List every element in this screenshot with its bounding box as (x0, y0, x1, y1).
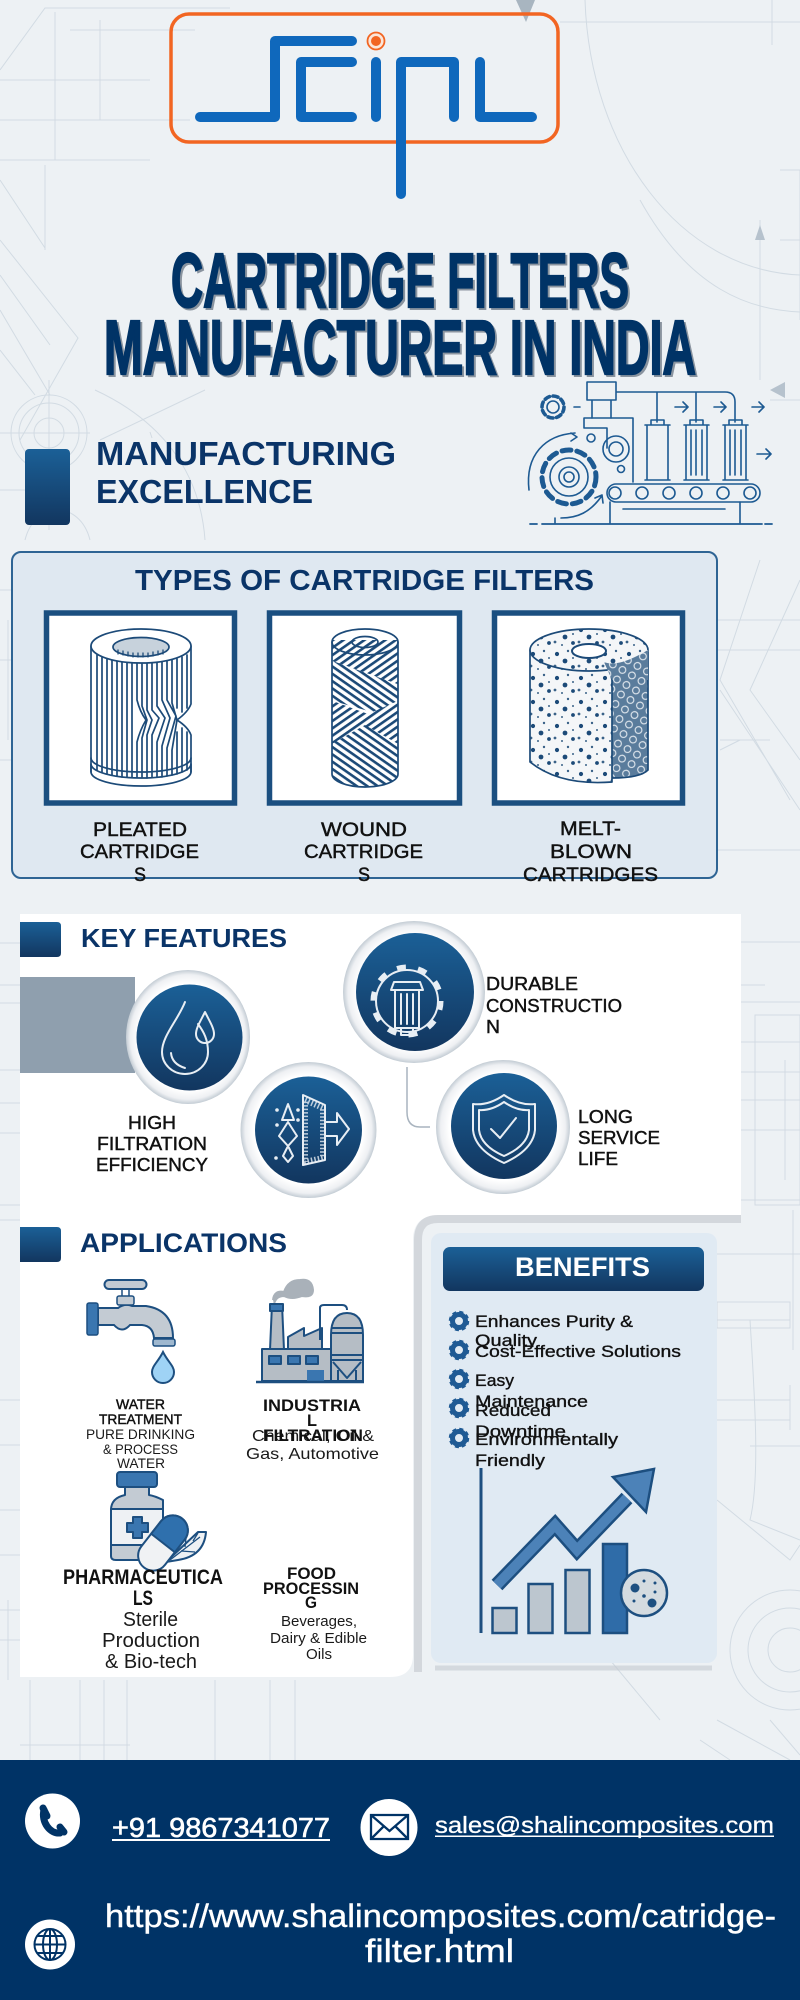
application: industrial filtration (246, 1280, 379, 1463)
website url (105, 1898, 776, 1969)
label: Production (102, 1630, 200, 1652)
icon: shield with check (436, 1060, 570, 1194)
connector (407, 1067, 430, 1127)
logo frame (171, 14, 558, 142)
icon: bottle, capsule and leaf (111, 1472, 206, 1577)
website url: filter.html (365, 1933, 514, 1969)
title shadow (106, 240, 698, 393)
label: DURABLE (486, 974, 578, 994)
panel heading: TYPES OF CARTRIDGE FILTERS (135, 565, 594, 597)
card (431, 1233, 717, 1663)
label: pleated cartridges: PLEATED (93, 819, 187, 841)
panel background (12, 552, 717, 878)
icon: water drops (126, 970, 250, 1104)
benefit list: Friendly (475, 1451, 546, 1470)
title (104, 238, 698, 393)
label: wound cartridges: CARTRIDGE (304, 841, 423, 863)
label: melt-blown cartridges: MELT- (560, 818, 621, 840)
footer band (0, 1760, 800, 2000)
heading: manufacturing excellence: MANUFACTURING (96, 435, 396, 472)
chart: rising bars with arrow (481, 1468, 667, 1633)
benefit list: Cost-Effective Solutions (475, 1342, 681, 1361)
label: melt-blown cartridges (523, 818, 658, 886)
application: food processing: Oils (306, 1646, 332, 1663)
label: TREATMENT (99, 1411, 182, 1427)
label: FILTRATION (97, 1134, 207, 1154)
application: food processing (263, 1564, 367, 1663)
heading: key features: KEY FEATURES (81, 923, 287, 953)
label: N (486, 1017, 500, 1037)
feature: high filtration efficiency (96, 970, 250, 1175)
feature: filtration (240, 1062, 376, 1198)
label: melt-blown cartridges: BLOWN (550, 841, 632, 863)
heading: manufacturing excellence (96, 435, 396, 510)
label: pleated cartridges: S (134, 864, 146, 886)
feature: durable construction (343, 921, 622, 1063)
label: SERVICE (578, 1128, 660, 1148)
illustration: wound cartridge (330, 629, 400, 790)
card: melt-blown (494, 613, 682, 803)
card: pleated (46, 613, 234, 803)
icon: manufacturing machine (528, 382, 772, 524)
application: water treatment (86, 1280, 195, 1471)
label: wound cartridges: WOUND (321, 819, 407, 841)
benefit list: Maintenance (475, 1392, 588, 1411)
panel: benefits (431, 1233, 717, 1668)
label: WATER (117, 1455, 165, 1471)
label: melt-blown cartridges: CARTRIDGES (523, 864, 658, 886)
application: food processing: G (305, 1593, 317, 1612)
logo (171, 14, 558, 194)
label: FILTRATION (263, 1426, 363, 1445)
icon: mail (360, 1799, 418, 1856)
feature: long service life (436, 1060, 660, 1194)
label (486, 974, 622, 1037)
application: food processing: Beverages, (281, 1613, 357, 1630)
label: & PROCESS (103, 1441, 178, 1457)
section block: manufacturing (25, 449, 70, 525)
label: Gas, Automotive (246, 1446, 379, 1463)
benefit list: Quality (475, 1331, 538, 1350)
icon: factory (256, 1280, 364, 1382)
label: WATER (116, 1396, 165, 1412)
benefits shadow (435, 1666, 712, 1670)
benefit list: Easy (475, 1371, 515, 1390)
label (86, 1396, 195, 1471)
phone number: +91 9867341077 (112, 1812, 330, 1843)
illustration: pleated cartridge (91, 629, 191, 786)
title text (104, 238, 696, 391)
icon: faucet (87, 1280, 175, 1383)
label: INDUSTRIA (263, 1396, 361, 1415)
label: LIFE (578, 1149, 618, 1169)
benefit list: Downtime (475, 1422, 566, 1441)
label (96, 1113, 208, 1175)
label: pleated cartridges: CARTRIDGE (80, 841, 199, 863)
benefit bullets (450, 1312, 468, 1447)
heading: applications: APPLICATIONS (80, 1228, 287, 1258)
benefits title: BENEFITS (515, 1252, 650, 1282)
label: PHARMACEUTICA (63, 1566, 223, 1589)
heading: manufacturing excellence: EXCELLENCE (96, 473, 313, 510)
application: food processing: FOOD (287, 1564, 336, 1583)
label: LS (133, 1587, 153, 1610)
email address: sales@shalincomposites.com (435, 1812, 774, 1838)
label: wound cartridges: S (358, 864, 370, 886)
icon: globe (25, 1920, 75, 1970)
label (246, 1396, 379, 1463)
label: wound cartridges (304, 819, 423, 886)
label: pleated cartridges (80, 819, 199, 886)
label: EFFICIENCY (96, 1155, 208, 1175)
label: PURE DRINKING (86, 1426, 195, 1442)
benefits blurred frame (418, 1219, 741, 1672)
website url: https://www.shalincomposites.com/catridge- (105, 1898, 776, 1934)
label: HIGH (128, 1113, 176, 1133)
label: L (307, 1411, 317, 1430)
application: food processing: PROCESSIN (263, 1579, 359, 1598)
benefit list: Reduced (475, 1401, 551, 1420)
footer (0, 1760, 800, 2000)
benefit list: Enhances Purity & (475, 1312, 634, 1331)
label: Sterile (123, 1609, 178, 1631)
logo letterforms (200, 41, 532, 194)
logo dot (368, 32, 384, 50)
white panel (20, 914, 741, 1677)
benefit list (475, 1312, 681, 1470)
icon: gear with filter (343, 921, 485, 1063)
application: food processing: Dairy & Edible (270, 1630, 367, 1647)
label: CONSTRUCTIO (486, 996, 622, 1016)
icon: phone (25, 1794, 80, 1848)
label: LONG (578, 1107, 633, 1127)
label: Chemical, Oil & (252, 1428, 374, 1445)
benefit list: Environmentally (475, 1430, 619, 1449)
icon: filter screen with arrow (240, 1062, 376, 1198)
label: & Bio-tech (105, 1651, 197, 1673)
panel: types of cartridge filters (12, 552, 717, 886)
label (63, 1566, 223, 1673)
label (578, 1107, 660, 1169)
illustration: melt-blown cartridge (530, 629, 648, 783)
application: pharmaceuticals (63, 1472, 223, 1673)
applications marker (20, 1227, 61, 1262)
key features marker (20, 922, 61, 957)
benefits header (443, 1247, 704, 1291)
card: wound (270, 613, 460, 803)
grey block (20, 977, 135, 1073)
panel: key features and applications (20, 914, 741, 1677)
